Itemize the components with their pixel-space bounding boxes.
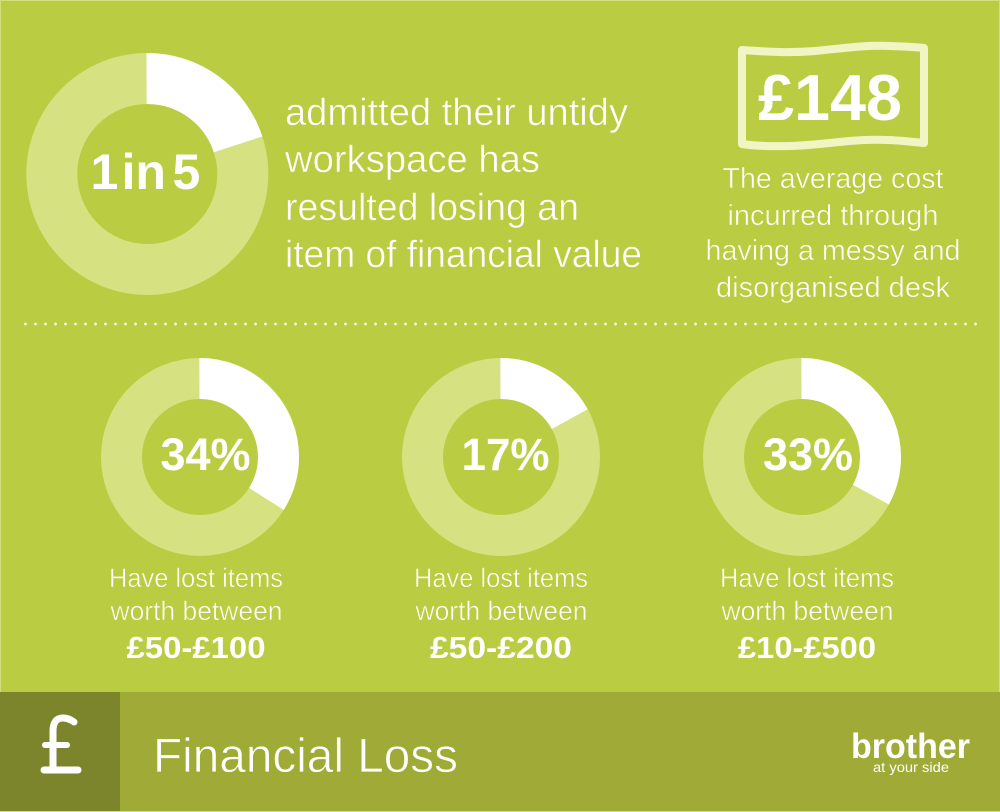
donut chart: 1 in 5: in (122, 144, 166, 200)
text: 33% caption: £10-£500 (738, 630, 876, 665)
icon: pound sign (44, 718, 78, 770)
text: untidy workspace statement: resulted losing an (285, 187, 579, 229)
donut chart: 17% (422, 378, 580, 536)
text: 34% caption: worth between (110, 596, 283, 626)
text: average cost description: disorganised desk (716, 272, 951, 304)
text: untidy workspace statement: admitted their untidy (285, 92, 628, 134)
text: average cost description: The average cost (722, 163, 944, 195)
text: average cost description: having a messy and (706, 235, 960, 267)
icon: banknote frame (742, 46, 924, 146)
text: 17% caption (414, 563, 588, 665)
logo: brother at your side: brother (851, 727, 970, 766)
footer band (0, 692, 1000, 811)
amount: £148: £148 (758, 61, 902, 134)
panel: 33% lost items (720, 378, 894, 665)
text: 17% caption: £50-£200 (430, 630, 572, 665)
panel: average cost (706, 46, 960, 304)
text: 34% caption: Have lost items (109, 563, 283, 593)
logo: brother at your side: at your side (873, 759, 949, 775)
text: untidy workspace statement: item of financial value (285, 234, 642, 276)
panel: 34% lost items (109, 378, 283, 665)
text: untidy workspace statement (284, 92, 642, 276)
text: 34% caption (109, 563, 283, 665)
text: 17% caption: Have lost items (414, 563, 588, 593)
donut chart: 34% (122, 378, 278, 536)
panel: 17% lost items (414, 378, 588, 665)
text: average cost description: incurred through (728, 200, 938, 232)
heading: Financial Loss: Financial Loss (153, 730, 458, 783)
donut chart: 17%: 17% (462, 429, 550, 480)
text: 33% caption: worth between (721, 596, 894, 626)
panel: 1 in 5 statistic (52, 78, 642, 276)
donut chart: 33%: 33% (763, 429, 853, 480)
panel: footer icon block (0, 692, 120, 811)
text: 33% caption: Have lost items (720, 563, 894, 593)
text: 17% caption: worth between (415, 596, 588, 626)
donut chart: 1 in 5 (52, 78, 243, 270)
text: 34% caption: £50-£100 (126, 630, 266, 665)
donut chart: 1 in 5: 5 (172, 144, 200, 200)
donut chart: 33% (724, 378, 880, 536)
donut chart: 1 in 5: 1 (90, 144, 118, 200)
text: untidy workspace statement: workspace has (284, 139, 540, 181)
text: average cost description (706, 163, 960, 304)
text: 33% caption (720, 563, 894, 665)
donut chart: 34%: 34% (160, 429, 251, 480)
